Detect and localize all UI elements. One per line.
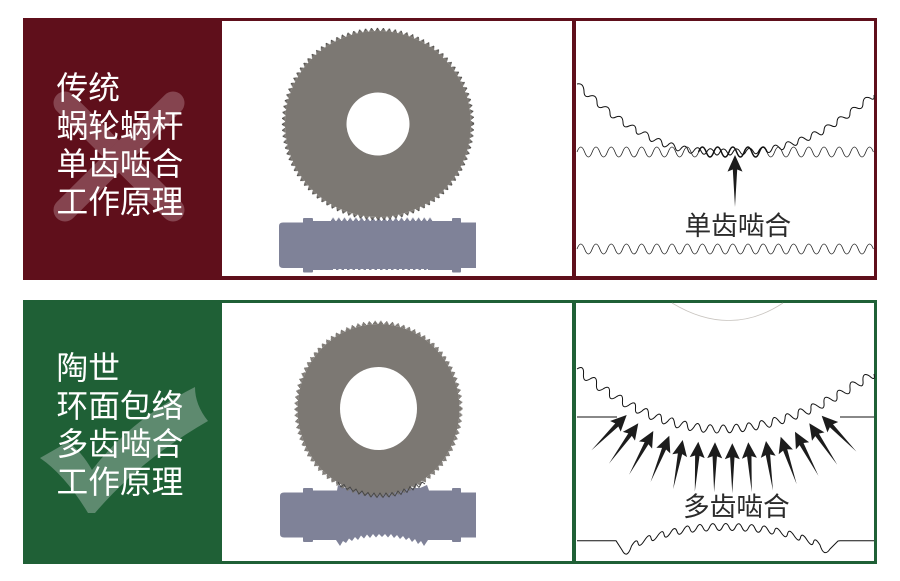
gear diagram background	[222, 303, 572, 561]
icon: check mark watermark	[40, 387, 208, 513]
worm shaft	[279, 218, 476, 272]
panel: traditional worm gear	[23, 18, 877, 280]
heading: traditional single tooth	[56, 70, 183, 220]
heading: traditional single tooth: 工作原理	[56, 184, 183, 220]
panel: enveloping worm gear	[23, 300, 877, 564]
heading: enveloping multi tooth: 工作原理	[56, 464, 183, 500]
arrows: multiple contact points	[586, 410, 862, 493]
heading: enveloping multi tooth	[56, 350, 183, 500]
heading: enveloping multi tooth: 多齿啮合	[56, 426, 183, 462]
divider	[572, 21, 576, 276]
worm wheel	[282, 28, 474, 220]
heading: traditional single tooth: 单齿啮合	[56, 146, 183, 182]
arrow: single contact point	[728, 155, 742, 207]
label: single tooth meshing: 单齿啮合	[684, 211, 791, 241]
meshing detail: worm wheel teeth	[577, 368, 874, 433]
worm wheel	[295, 321, 462, 498]
meshing detail: engaged tooth emphasis	[699, 147, 767, 157]
panel frame: green	[23, 300, 877, 564]
meshing detail: worm wheel teeth	[577, 84, 874, 155]
worm shaft	[280, 485, 476, 546]
label: multi tooth meshing: 多齿啮合	[683, 492, 790, 522]
meshing detail: lower worm teeth	[577, 524, 874, 554]
panel frame: maroon	[23, 18, 877, 280]
heading: enveloping multi tooth: 环面包络	[56, 388, 183, 424]
meshing detail background	[576, 303, 874, 561]
heading: enveloping multi tooth: 陶世	[56, 350, 120, 386]
divider	[572, 303, 576, 561]
meshing detail: worm teeth upper	[577, 147, 873, 157]
heading: traditional single tooth: 传统	[56, 70, 120, 106]
meshing detail: upper wheel arc	[672, 303, 783, 320]
gear diagram background	[222, 21, 572, 276]
heading: traditional single tooth: 蜗轮蜗杆	[56, 108, 183, 144]
meshing detail background	[576, 21, 874, 276]
icon: cross watermark	[65, 103, 173, 210]
meshing detail: upper worm rim	[577, 416, 874, 418]
meshing detail: worm teeth lower	[577, 244, 873, 254]
